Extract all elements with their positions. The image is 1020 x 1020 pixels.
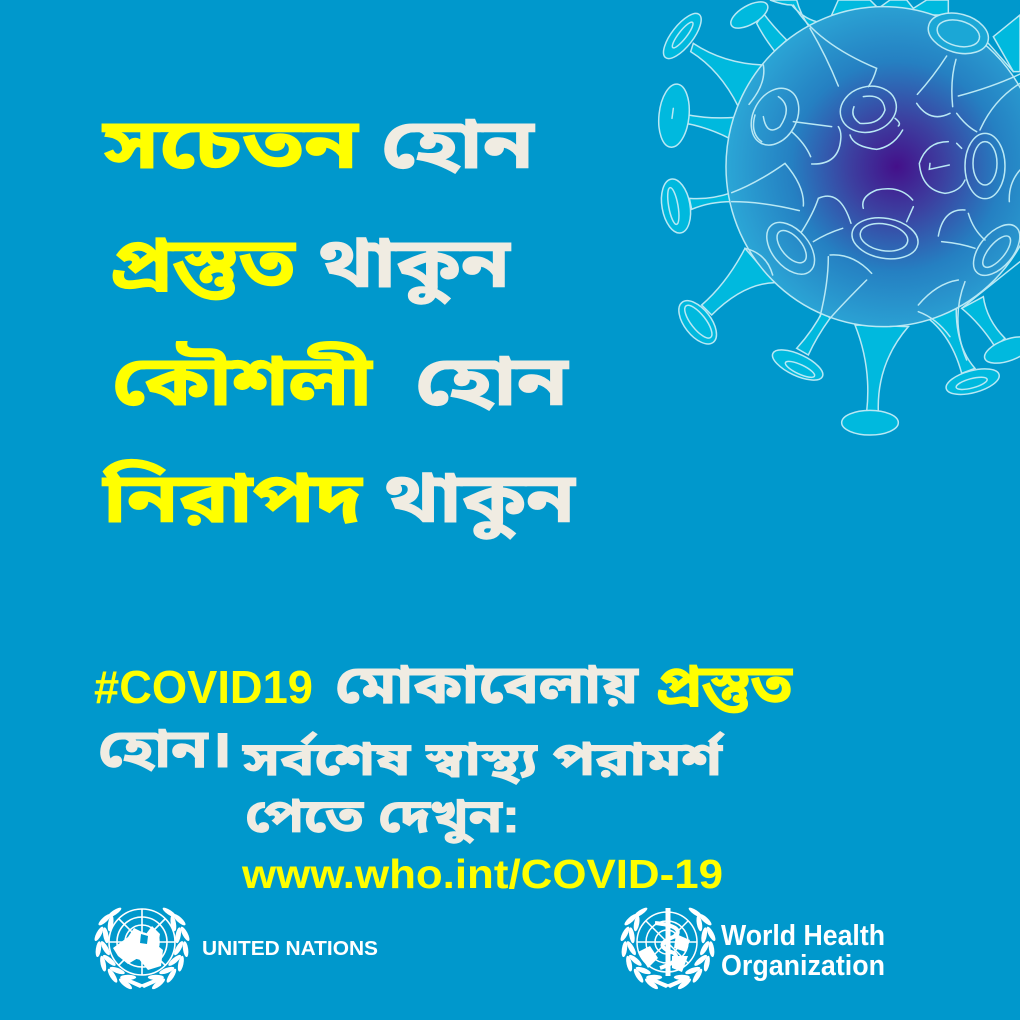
website link: www.who.int/COVID-19 bbox=[241, 851, 723, 897]
spike lines inside body bbox=[732, 5, 1020, 360]
heading line 1: হোন bbox=[381, 105, 536, 183]
heading line 1: সচেতন bbox=[102, 105, 360, 183]
heading line 4: নিরাপদ bbox=[102, 459, 363, 537]
call to action text: #COVID19 bbox=[94, 661, 313, 713]
logo: World Health Organization bbox=[619, 906, 885, 991]
heading line 4 bbox=[102, 459, 577, 539]
heading line 3 bbox=[112, 341, 570, 420]
spike: left lower bbox=[657, 177, 732, 235]
emblem: UN bbox=[93, 906, 191, 991]
spike: bottom bbox=[842, 325, 908, 435]
spike: top bbox=[770, 0, 948, 28]
label: World Health Organization: World Health bbox=[721, 920, 885, 952]
heading line 2: প্রস্তুত bbox=[110, 224, 296, 302]
call to action text bbox=[94, 655, 793, 844]
spike: right lower bbox=[962, 297, 1020, 369]
inner heads bbox=[742, 7, 1020, 284]
label: World Health Organization bbox=[721, 920, 885, 982]
spike: top left bbox=[727, 0, 787, 52]
heading line 1 bbox=[102, 105, 536, 183]
call to action text: মোকাবেলায় bbox=[335, 655, 639, 715]
emblem: WHO bbox=[619, 906, 717, 991]
spike: left bbox=[656, 83, 735, 149]
label: World Health Organization: Organization bbox=[721, 950, 885, 982]
call to action text: পেতে দেখুন: bbox=[245, 789, 520, 844]
heading line 2: থাকুন bbox=[318, 224, 512, 304]
spike: upper right bbox=[993, 15, 1020, 72]
spike: upper left bbox=[657, 8, 763, 107]
call to action text: হোন। bbox=[98, 719, 232, 779]
spike: bottom right bbox=[918, 283, 1002, 399]
call to action text: সর্বশেষ স্বাস্থ্য পরামর্শ bbox=[242, 731, 725, 785]
illustration: coronavirus bbox=[656, 0, 1020, 435]
call to action text: প্রস্তুত bbox=[656, 655, 793, 715]
heading line 2 bbox=[110, 224, 512, 304]
spike: lower left bbox=[672, 248, 775, 351]
spike: bottom left bbox=[768, 310, 830, 386]
virus body bbox=[726, 7, 1020, 327]
heading line 4: থাকুন bbox=[384, 459, 577, 539]
logo: United Nations bbox=[93, 906, 378, 991]
heading line 3: কৌশলী bbox=[112, 341, 373, 420]
label: United Nations: UNITED NATIONS bbox=[202, 937, 378, 960]
heading line 3: হোন bbox=[415, 342, 570, 420]
